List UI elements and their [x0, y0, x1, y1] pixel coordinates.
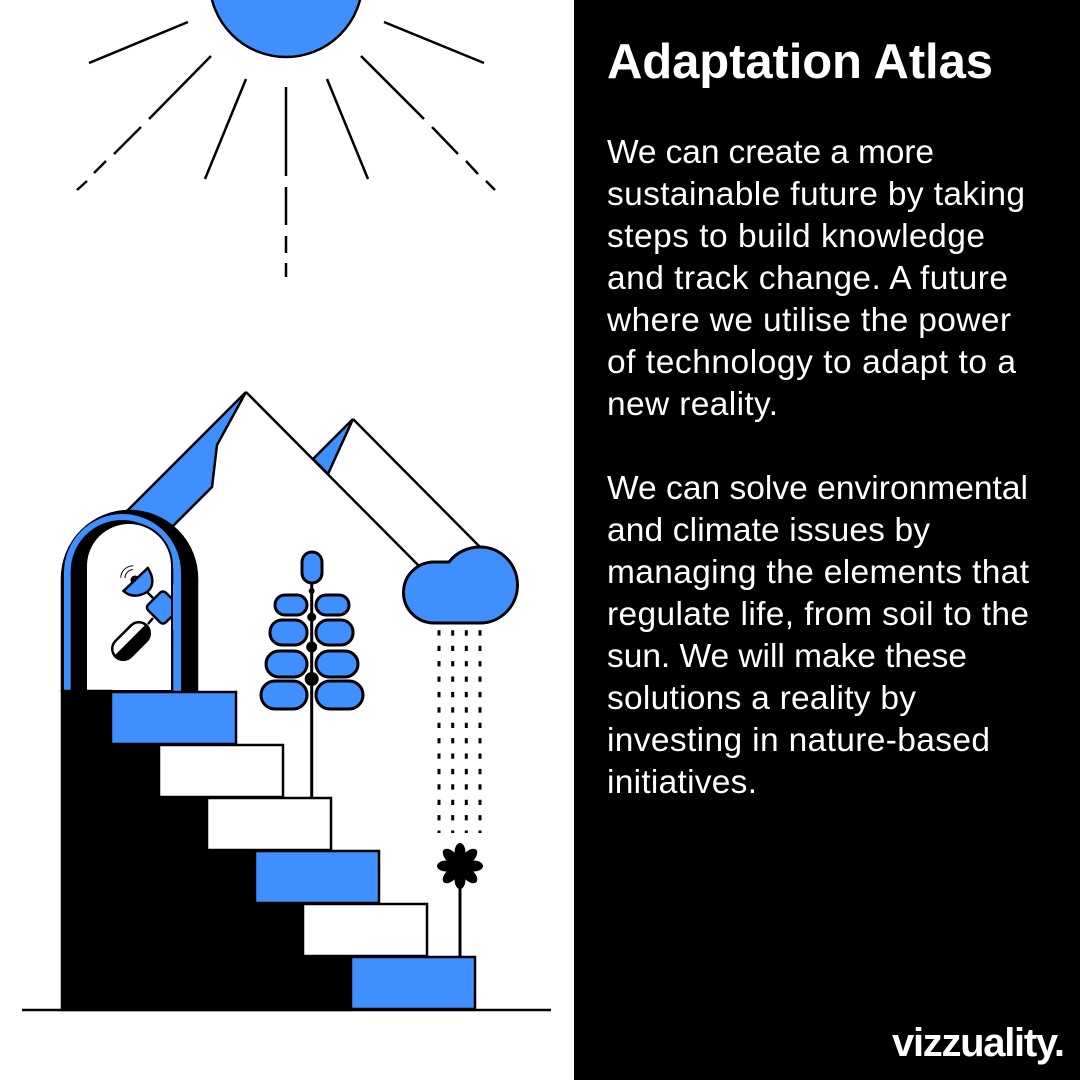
- icon: rain cloud: [403, 547, 518, 833]
- text block: second paragraph: [607, 470, 1030, 801]
- text block: second paragraph: solutions a reality by: [607, 680, 916, 717]
- text block: first paragraph: steps to build knowledge: [607, 218, 985, 255]
- text block: second paragraph: managing the elements that: [607, 554, 1030, 591]
- text block: first paragraph: and track change. A future: [607, 260, 1008, 297]
- text block: second paragraph: sun. We will make these: [607, 638, 967, 675]
- text block: first paragraph: new reality.: [607, 386, 778, 423]
- text block: first paragraph: We can create a more: [607, 134, 934, 171]
- icon: flower: [437, 843, 483, 957]
- staircase: [62, 691, 475, 1010]
- text block: second paragraph: investing in nature-based: [607, 722, 990, 759]
- panel: illustration: [22, 0, 551, 1010]
- ground line: [22, 1009, 551, 1011]
- text block: second paragraph: We can solve environmental: [607, 470, 1028, 507]
- text block: second paragraph: regulate life, from soil to the: [607, 596, 1029, 633]
- text block: first paragraph: where we utilise the power: [606, 302, 1011, 339]
- icon: sun disc: [210, 0, 362, 57]
- mountains: [127, 392, 480, 567]
- logo: vizzuality: vizzuality.: [892, 1021, 1065, 1065]
- text block: second paragraph: initiatives.: [607, 764, 757, 801]
- text block: first paragraph: sustainable future by taking: [607, 176, 1025, 213]
- text block: first paragraph: [606, 134, 1025, 423]
- title: Adaptation Atlas: [607, 35, 993, 89]
- text block: first paragraph: of technology to adapt to a: [607, 344, 1016, 381]
- icon: satellite: [108, 566, 185, 664]
- sun rays: [77, 22, 495, 277]
- panel: text background: [574, 0, 1080, 1080]
- text block: second paragraph: and climate issues by: [607, 512, 930, 549]
- arch window with satellite: [62, 511, 197, 691]
- plant: [261, 552, 363, 798]
